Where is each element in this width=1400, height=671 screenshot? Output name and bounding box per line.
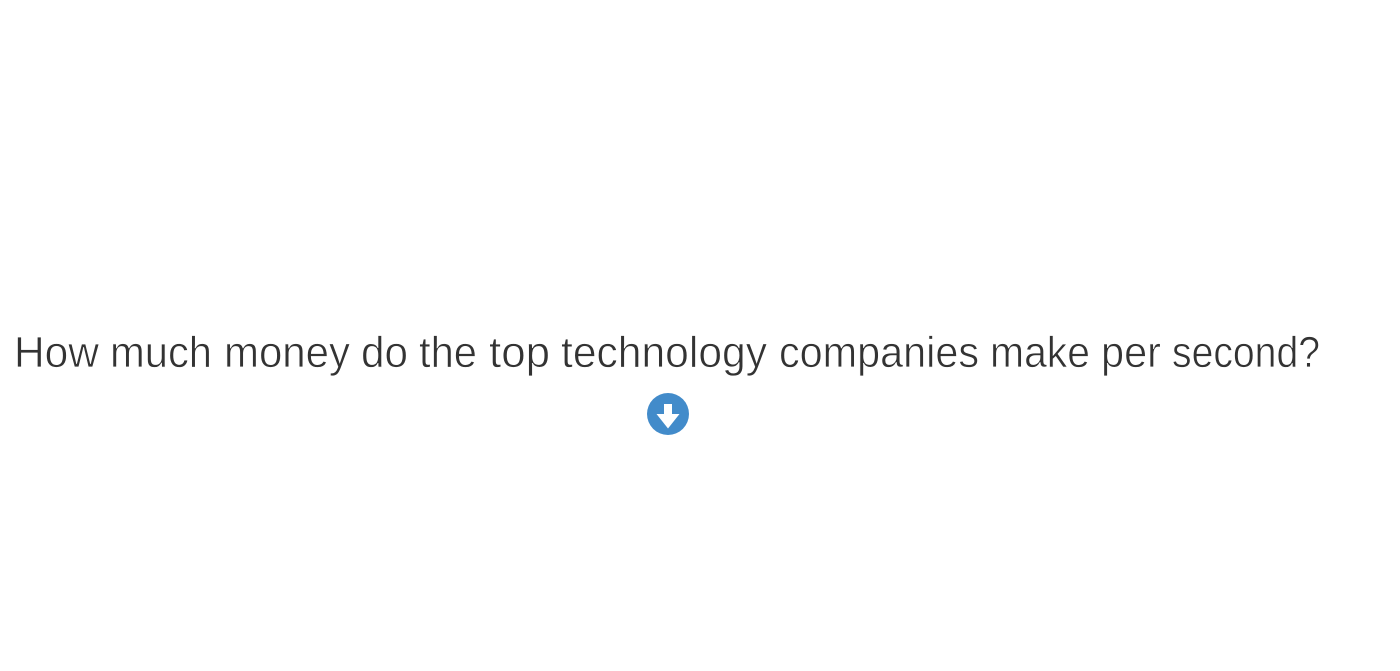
title: How <box>14 328 99 377</box>
title: top <box>489 328 550 377</box>
icon: down arrow in blue circle <box>647 393 689 435</box>
title: second? <box>1172 328 1320 377</box>
title: per <box>1101 328 1161 377</box>
title <box>14 328 1320 377</box>
title: the <box>419 328 477 377</box>
title: do <box>361 328 408 377</box>
title: companies <box>779 328 979 377</box>
title: much <box>110 328 212 377</box>
title: make <box>990 328 1090 377</box>
title: money <box>224 328 350 377</box>
title: technology <box>561 328 767 377</box>
